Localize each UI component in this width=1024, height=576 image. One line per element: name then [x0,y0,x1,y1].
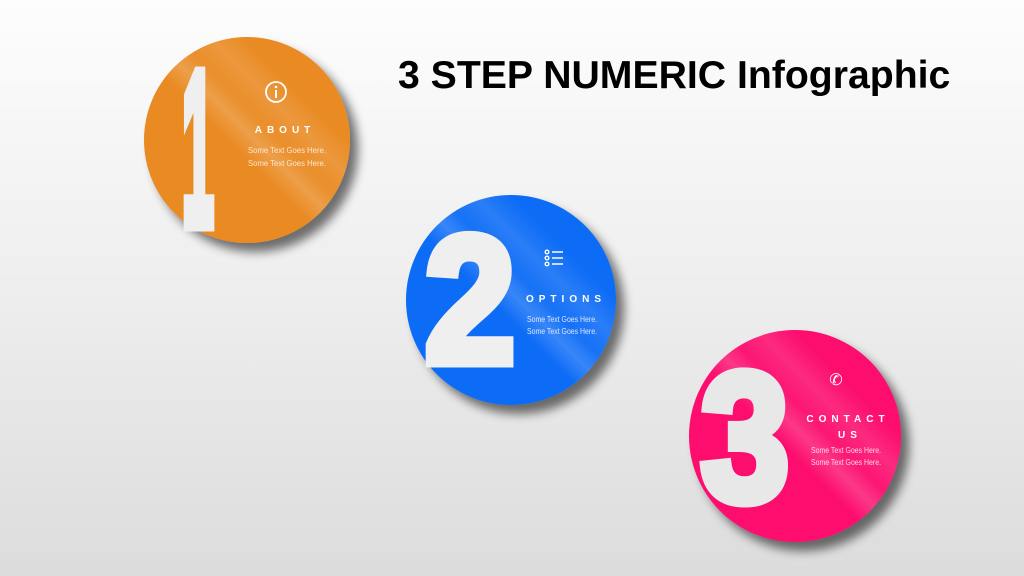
text block: Some Text Goes Here. [527,326,597,336]
panel: step 1 about: 1 [182,28,214,271]
icon: phone: ✆ [829,370,843,389]
panel: step 3 contact [689,330,901,542]
text block: Some Text Goes Here. [811,457,881,467]
heading: options: OPTIONS [526,294,606,305]
title: 3 STEP NUMERIC Infographic [398,54,950,97]
panel: step 2 options [406,195,616,405]
text block: Some Text Goes Here. [527,314,597,324]
heading: contact us: CONTACT [806,414,890,425]
text block: Some Text Goes Here. [811,445,881,455]
panel: step 1 about [144,28,350,271]
heading: about: ABOUT [255,125,315,136]
heading: contact us: US [838,430,862,441]
icon: info [266,82,286,102]
icon: list [545,250,563,266]
text block: Some Text Goes Here. [248,158,326,168]
text block: Some Text Goes Here. [248,145,326,155]
number 2: 2 [425,200,515,401]
number 3: 3 [701,335,789,539]
